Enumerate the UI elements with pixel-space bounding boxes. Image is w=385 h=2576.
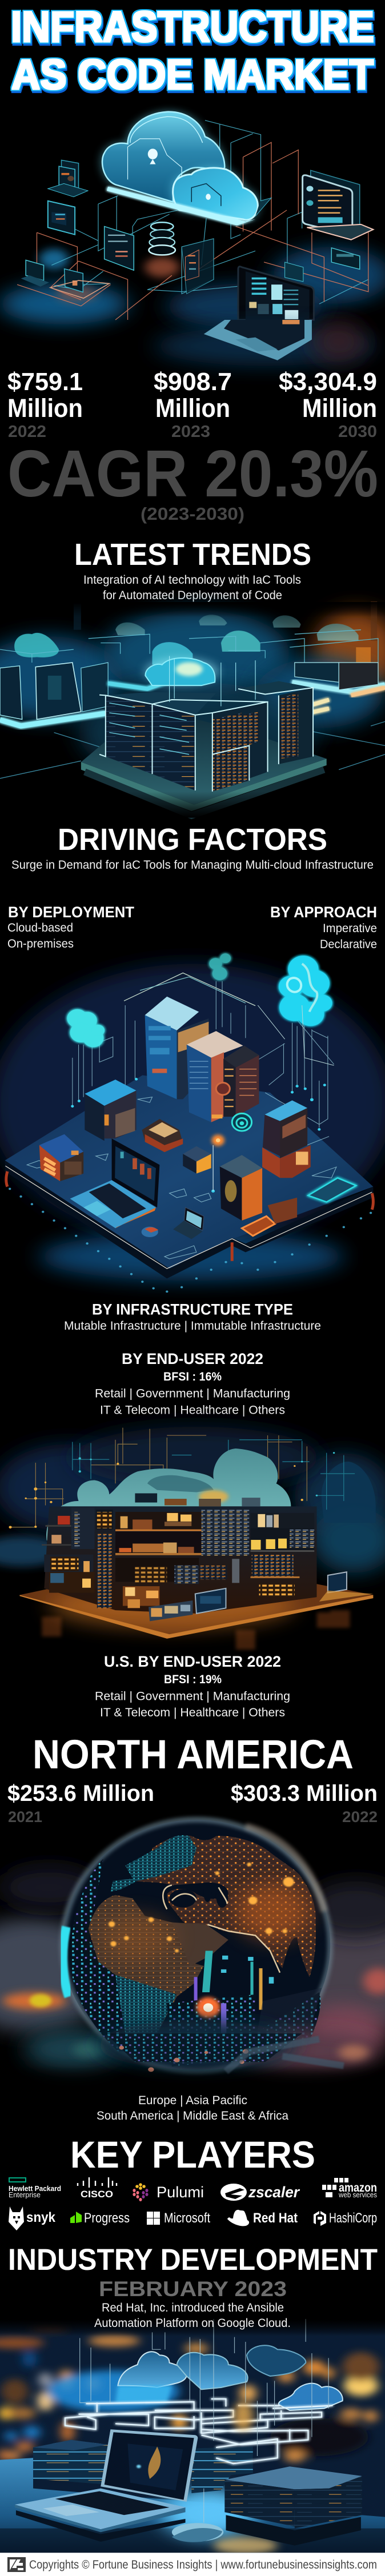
fade under illustration: [0, 602, 385, 617]
stat: north america 2022: 2022: [342, 1808, 378, 1825]
text: other regions: [97, 2094, 288, 2122]
segment: by end-user 2022: [95, 1350, 290, 1417]
logo: Zscaler: zscaler: [248, 2184, 300, 2201]
stat: 2023 value: [154, 368, 232, 441]
segment: U.S. by end-user 2022: [95, 1653, 290, 1719]
logo: Cisco: [78, 2177, 117, 2200]
stat: 2022 value: Million: [7, 394, 83, 423]
stat: 2023 value: $908.7: [154, 368, 232, 396]
stat: 2022 value: 2022: [8, 423, 46, 441]
heading: key players: KEY PLAYERS: [70, 2133, 315, 2176]
logo: Red Hat: Red Hat: [253, 2210, 298, 2226]
stat: 2023 value: Million: [155, 394, 230, 423]
logo: Microsoft: [147, 2210, 210, 2226]
segment: by end-user 2022: Retail | Government | Manufacturing: [95, 1387, 290, 1401]
segment: by end-user 2022: IT & Telecom | Healthcare | Others: [100, 1404, 285, 1417]
logo: Hewlett Packard Enterprise: Hewlett Packard: [9, 2185, 61, 2193]
logo: Snyk: [9, 2206, 56, 2230]
illustration: glowing server cubes: [0, 601, 385, 818]
logo: Hewlett Packard Enterprise: [9, 2178, 61, 2199]
segment: by deployment: Cloud-based: [7, 921, 73, 934]
heading: latest trends: LATEST TRENDS: [74, 537, 311, 572]
heading: north america: NORTH AMERICA: [33, 1732, 354, 1777]
logo: Progress: [70, 2210, 130, 2226]
segment: by infrastructure type: [64, 1301, 321, 1333]
stat: 2023 value: 2023: [171, 423, 210, 441]
text: latest trends description: Integration of AI technology with IaC Tools: [83, 573, 301, 587]
icon: Fortune Business Insights logo: [7, 2557, 26, 2572]
text: red hat development: [94, 2301, 291, 2330]
text: latest trends description: [83, 573, 301, 602]
segment: by approach: Imperative: [323, 922, 377, 935]
logo: Hewlett Packard Enterprise: Enterprise: [9, 2191, 41, 2199]
stat: 2030 value: Million: [302, 394, 377, 423]
segment: U.S. by end-user 2022: BFSI : 19%: [164, 1673, 222, 1686]
stat: north america 2022: [231, 1781, 378, 1825]
segment: by approach: [270, 904, 377, 951]
footer bar: [0, 2553, 385, 2576]
stat: 2022 value: [7, 368, 83, 441]
logo: Snyk: snyk: [26, 2210, 56, 2225]
logo: Amazon Web Services: [322, 2178, 377, 2199]
logo: Pulumi: [133, 2183, 204, 2201]
heading: driving factors: DRIVING FACTORS: [58, 822, 327, 857]
segment: by approach: Declarative: [320, 938, 377, 951]
logo: Red Hat: [227, 2210, 298, 2226]
stat: 2030 value: $3,304.9: [279, 368, 377, 396]
segment: by end-user 2022: BY END-USER 2022: [122, 1350, 263, 1367]
text: latest trends description: for Automated Deployment of Code: [103, 589, 282, 602]
illustration: cutaway cloud building: [0, 1427, 385, 1650]
stat: 2030 value: [279, 368, 377, 441]
illustration: digital globe: [0, 1820, 385, 2071]
stat: 2022 value: $759.1: [7, 368, 83, 396]
title: [11, 3, 374, 98]
stat: north america 2021: [7, 1781, 154, 1825]
segment: U.S. by end-user 2022: Retail | Government | Manufacturing: [95, 1690, 290, 1703]
date: february 2023: FEBRUARY 2023: [99, 2277, 287, 2301]
segment: by approach: BY APPROACH: [270, 904, 377, 921]
segment: by deployment: [7, 904, 134, 950]
text: red hat development: Red Hat, Inc. introduced the Ansible: [102, 2301, 284, 2314]
CAGR figure: (2023-2030): [141, 504, 244, 524]
segment: by deployment: BY DEPLOYMENT: [8, 904, 134, 921]
logo: Amazon Web Services: web services: [338, 2190, 377, 2199]
illustration: cloud network hero: [0, 112, 385, 366]
text: red hat development: Automation Platform on Google Cloud.: [94, 2317, 291, 2330]
logo: HashiCorp: [314, 2210, 377, 2226]
text: driving factors description: Surge in Demand for IaC Tools for Managing Multi-cloud Infrastructure: [11, 858, 374, 872]
text: other regions: Europe | Asia Pacific: [138, 2094, 247, 2107]
stat: north america 2022: $303.3 Million: [231, 1781, 378, 1806]
logo: Pulumi: Pulumi: [157, 2184, 204, 2201]
logo: Progress: Progress: [84, 2210, 130, 2226]
stat: 2030 value: 2030: [338, 423, 377, 441]
fade above bottom illustration: [0, 2308, 385, 2336]
text: other regions: South America | Middle East & Africa: [97, 2109, 288, 2122]
segment: by deployment: On-premises: [7, 937, 74, 950]
stat: north america 2021: $253.6 Million: [7, 1781, 154, 1806]
logo: Cisco: CISCO: [81, 2189, 113, 2200]
segment: by end-user 2022: BFSI : 16%: [163, 1370, 222, 1383]
segment: U.S. by end-user 2022: U.S. BY END-USER 2022: [104, 1653, 281, 1670]
stat: north america 2021: 2021: [8, 1808, 42, 1825]
logo: Microsoft: Microsoft: [164, 2210, 210, 2226]
illustration: isometric data centre: [0, 953, 385, 1293]
illustration: laptop, servers and clouds: [0, 2319, 385, 2554]
logo: Amazon Web Services: amazon: [339, 2181, 377, 2194]
segment: U.S. by end-user 2022: IT & Telecom | Healthcare | Others: [100, 1706, 285, 1719]
logo: Zscaler: [220, 2184, 300, 2201]
segment: by infrastructure type: Mutable Infrastructure | Immutable Infrastructure: [64, 1319, 321, 1333]
segment: by infrastructure type: BY INFRASTRUCTURE TYPE: [92, 1301, 293, 1318]
